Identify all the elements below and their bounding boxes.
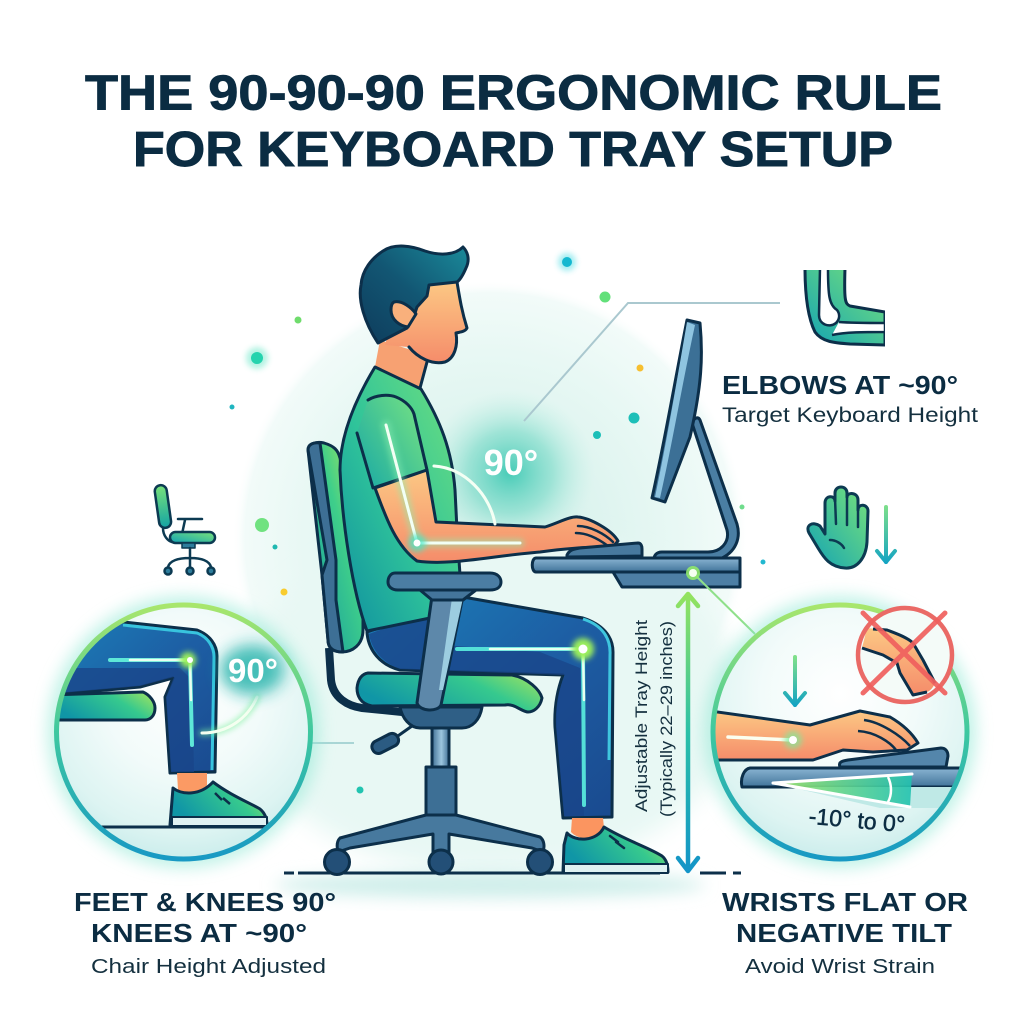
monitor stand [654,418,738,559]
casters [324,850,552,874]
shirt [340,367,463,631]
feet and knees caption: Chair Height Adjusted [91,956,326,978]
armrest and post [388,573,501,710]
knee glow [220,645,284,695]
column sleeve [426,767,456,817]
wrists caption [722,887,968,978]
gas cylinder [432,728,449,768]
chair seat [357,673,542,712]
tilt lever [370,726,412,756]
arrow: wrist down [785,657,805,705]
ring [56,605,310,859]
90 degree elbow label: 90° [484,442,538,483]
sock [571,818,604,838]
title [85,66,942,177]
chair backrest [308,442,363,652]
icon: flat hand [808,487,868,568]
knee guide lines [110,652,257,745]
seat mechanism [400,707,482,728]
sleeve [357,395,427,488]
floor line [284,872,741,874]
wrists caption: NEGATIVE TILT [736,918,952,948]
face [385,282,467,363]
shoe crop [170,782,267,825]
tray crop [741,768,975,787]
90 degree knee label: 90° [228,652,278,689]
forearm and hand crop [710,711,918,760]
seat crop [50,692,155,720]
tray shadow [794,787,952,808]
tray underside [613,572,740,587]
monitor screen [652,320,701,502]
office chair [308,442,552,874]
callout line: knee circle [312,742,354,744]
keyboard [567,543,642,557]
pants [367,597,613,818]
callout line: elbows [524,303,780,421]
fingers [576,526,613,546]
tray height arrow [678,594,698,871]
floor crop [100,826,267,828]
monitor [652,320,738,559]
icon: elbow joint [805,268,885,345]
keyboard crop [839,748,948,767]
tray top [532,558,740,572]
arrow: down [877,507,895,562]
leg shading [66,668,194,772]
face outline [409,282,467,363]
title: FOR KEYBOARD TRAY SETUP [133,123,893,177]
tilt wedge [773,774,912,807]
sock crop [177,773,207,792]
tray height label: Adjustable Tray Height [632,620,651,812]
decorative particles [230,253,766,794]
wrists caption: Avoid Wrist Strain [745,956,935,978]
tilt label: -10° to 0° [808,803,906,837]
panel: wrist detail circle [704,596,976,868]
elbows subtext: Target Keyboard Height [722,404,978,427]
feet and knees caption: KNEES AT ~90° [91,918,307,948]
person [340,246,668,873]
leg crop [50,622,217,773]
feet and knees caption: FEET & KNEES 90° [74,887,336,917]
shoe [563,827,668,872]
feet and knees caption [74,887,336,978]
wrist guide line [728,731,802,749]
ear [391,302,416,327]
pants shading [369,612,584,816]
neck [375,340,427,389]
keyboard tray [532,543,740,587]
icon: small chair [154,484,215,574]
ring [713,605,967,859]
ergonomic guide lines: knee [457,638,594,805]
tray height range: (Typically 22–29 inches) [657,621,676,817]
bad wrist prohibited sign [858,608,952,702]
ergonomic guide lines: elbow [386,425,520,552]
wrists caption: WRISTS FLAT OR [722,887,968,917]
title: THE 90-90-90 ERGONOMIC RULE [85,66,942,120]
chair back support [329,648,402,712]
forearm and hand [375,470,618,562]
knee highlight [583,619,610,760]
panel: knee detail circle [48,596,320,868]
elbows heading: ELBOWS AT ~90° [722,370,958,400]
star base [337,815,544,852]
background glow [232,280,748,898]
hair [360,246,468,343]
tray marker [686,566,755,634]
